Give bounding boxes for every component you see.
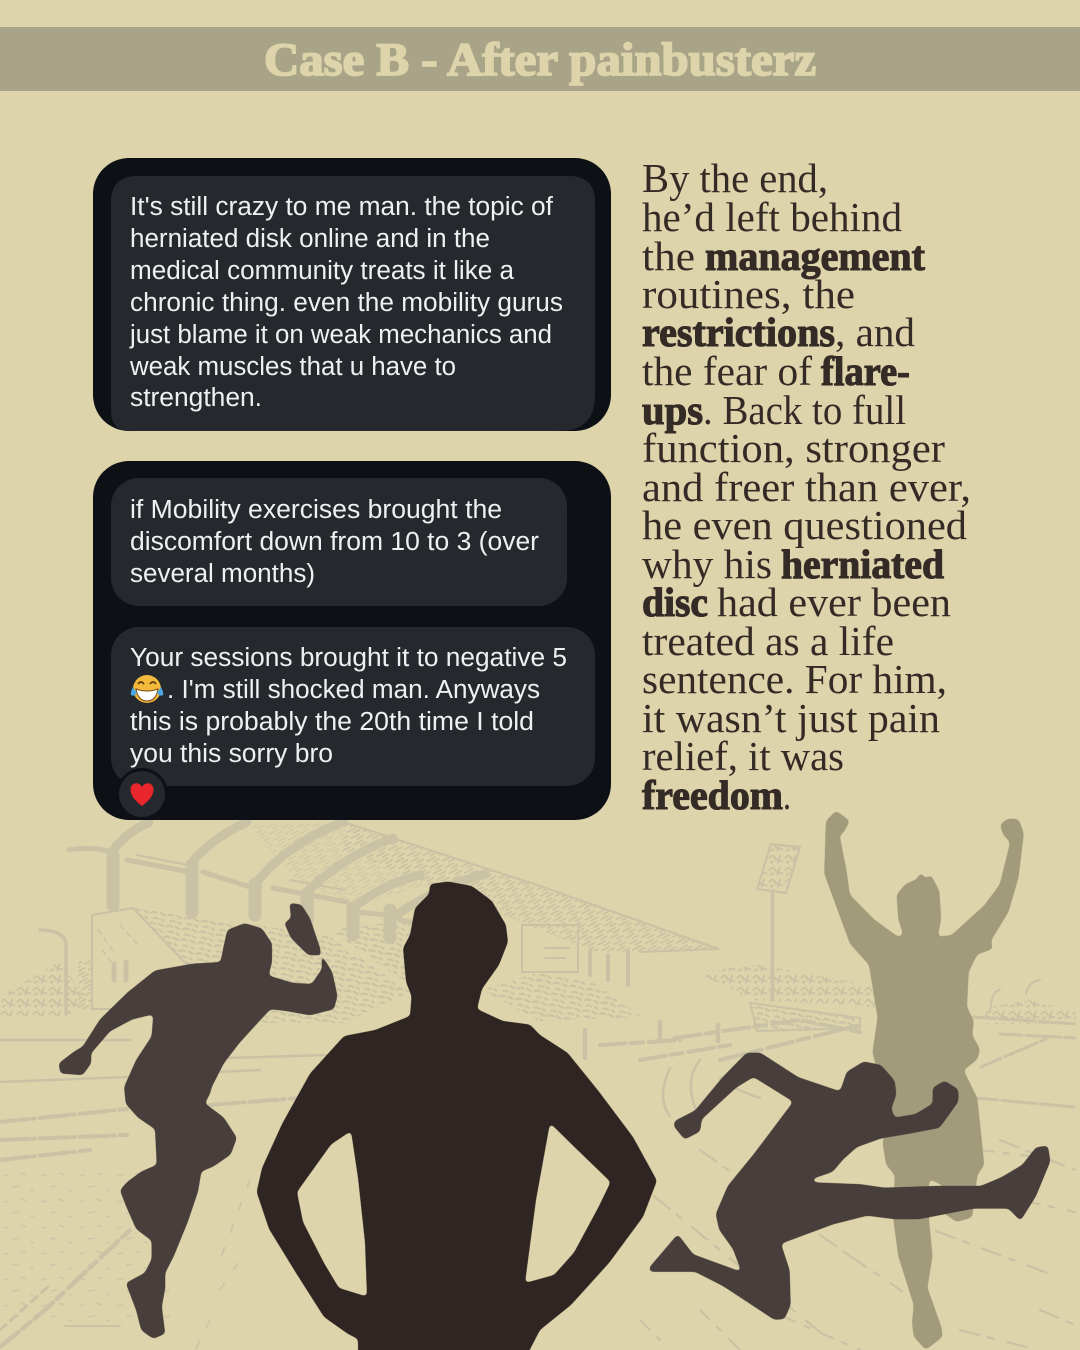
panel: chat screenshot one xyxy=(93,158,611,431)
text block: story paragraph: . Back to full xyxy=(703,387,906,433)
chat text three: . I'm still shocked man. Anyways xyxy=(167,676,540,704)
text block: story paragraph: treated as a life xyxy=(642,618,894,664)
silhouette: sprinting runner xyxy=(59,903,338,1339)
header banner xyxy=(0,27,1080,91)
text block: story paragraph: sentence. For him, xyxy=(642,656,947,702)
chat bubble three xyxy=(111,627,595,786)
silhouette: jumping runner xyxy=(648,1053,1050,1320)
text block: story paragraph: relief, it was xyxy=(642,733,844,779)
silhouette: man with hands on hips xyxy=(257,882,657,1350)
text block: story paragraph: the fear of xyxy=(642,348,812,394)
text block: story paragraph: herniated xyxy=(781,541,944,587)
text block: story paragraph: management xyxy=(705,233,925,279)
chat text one: herniated disk online and in the xyxy=(130,225,490,253)
text block: story paragraph: By the end, xyxy=(642,155,828,201)
stadium sketch background xyxy=(0,822,1077,1350)
text block: story paragraph: why his xyxy=(642,541,772,587)
chat bubble one xyxy=(111,176,595,431)
icon: laughing emoji xyxy=(131,675,163,703)
chat bubble two xyxy=(111,478,567,606)
chat text three xyxy=(130,644,567,768)
chat text one: chronic thing. even the mobility gurus xyxy=(130,289,563,317)
text block: story paragraph xyxy=(642,155,971,818)
silhouette: cheering man xyxy=(824,811,1024,1350)
text block: story paragraph: flare- xyxy=(821,348,910,394)
icon: heart reaction xyxy=(116,768,168,820)
chat text three: this is probably the 20th time I told xyxy=(130,708,534,736)
chat text one xyxy=(129,193,563,412)
text block: story paragraph: it wasn’t just pain xyxy=(642,695,940,741)
text block: story paragraph: he’d left behind xyxy=(642,194,902,240)
chat text two: if Mobility exercises brought the xyxy=(130,496,502,524)
text block: story paragraph: the xyxy=(642,233,695,279)
text block: story paragraph: and freer than ever, xyxy=(642,464,971,510)
chat text three: Your sessions brought it to negative 5 xyxy=(130,644,567,672)
chat text two: several months) xyxy=(130,560,315,588)
text block: story paragraph: disc xyxy=(642,579,708,625)
chat text one: medical community treats it like a xyxy=(130,257,515,285)
chat text three: you this sorry bro xyxy=(130,740,333,768)
text block: story paragraph: . xyxy=(783,772,791,818)
text block: story paragraph: freedom xyxy=(642,772,783,818)
chat text one: It's still crazy to me man. the topic of xyxy=(130,193,554,221)
title: Case B - After painbusterz xyxy=(264,34,816,86)
text block: story paragraph: he even questioned xyxy=(642,502,967,548)
panel: chat screenshot two xyxy=(93,461,611,820)
text block: story paragraph: function, stronger xyxy=(642,425,945,471)
text block: story paragraph: had ever been xyxy=(717,579,951,625)
chat text one: weak muscles that u have to xyxy=(129,353,456,381)
text block: story paragraph: routines, the xyxy=(642,271,855,317)
chat text one: strengthen. xyxy=(130,384,262,412)
text block: story paragraph: restrictions xyxy=(642,309,835,355)
chat text two xyxy=(130,496,540,588)
chat text one: just blame it on weak mechanics and xyxy=(129,321,552,349)
chat text two: discomfort down from 10 to 3 (over xyxy=(130,528,540,556)
text block: story paragraph: ups xyxy=(642,387,703,433)
text block: story paragraph: , and xyxy=(835,309,915,355)
